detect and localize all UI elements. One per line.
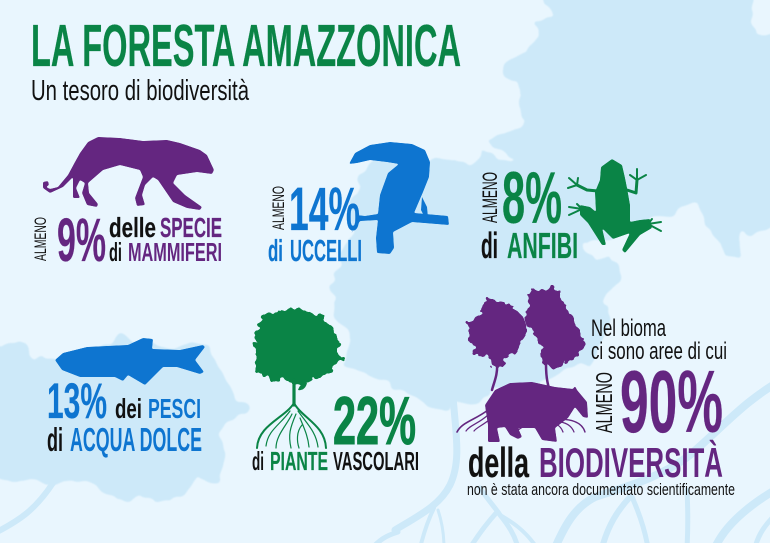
label: almeno: ALMENO — [269, 186, 288, 230]
panel: mammals — [31, 137, 222, 274]
text: delle specie: delle — [109, 212, 156, 243]
icon: tree with roots — [255, 309, 343, 448]
panel: amphibians: ANFIBI — [507, 225, 578, 266]
icon: trees and tapir — [457, 288, 588, 442]
panel: fish: PESCI — [148, 393, 201, 424]
subtitle: Un tesoro di biodiversità — [31, 75, 250, 107]
icon: toucan tail tuft — [421, 197, 428, 218]
text: di mammiferi: di — [109, 237, 122, 267]
panel: amphibians — [479, 158, 661, 266]
text: di uccelli: di — [268, 233, 283, 268]
panel: fish — [47, 338, 205, 458]
text: di acqua dolce: di — [47, 421, 63, 458]
text: di anfibi: di — [481, 225, 498, 266]
text: di piante vascolari: di — [252, 446, 264, 476]
panel: mammals: MAMMIFERI — [128, 237, 222, 267]
text: della biodiversità — [468, 439, 723, 486]
number: 13%: 13% — [47, 373, 107, 429]
icon: jaguar — [43, 137, 214, 210]
number: 8%: 8% — [502, 158, 562, 239]
icon: fish — [55, 338, 205, 385]
label: almeno: ALMENO — [479, 172, 502, 223]
text: dei pesci: dei — [115, 393, 142, 424]
text: della biodiversità: della — [468, 439, 529, 486]
text: di piante vascolari — [252, 446, 419, 476]
background: root strokes — [0, 378, 770, 543]
panel: birds — [268, 142, 449, 268]
panel: mammals: SPECIE — [160, 212, 222, 243]
text: nel bioma: Nel bioma — [591, 315, 666, 342]
icon: toucan — [348, 142, 449, 254]
number: 14%: 14% — [289, 175, 360, 243]
icon: frog — [568, 159, 661, 253]
number: 9%: 9% — [57, 206, 106, 274]
label: almeno: ALMENO — [591, 372, 617, 433]
text: di piante vascolari: PIANTE — [270, 446, 328, 476]
panel: fish: ACQUA DOLCE — [70, 421, 202, 458]
panel: plants — [252, 309, 419, 476]
text: di piante vascolari: VASCOLARI — [333, 446, 419, 476]
label: almeno: ALMENO — [31, 217, 50, 261]
panel: biome — [457, 288, 735, 499]
number: 22%: 22% — [333, 383, 416, 459]
panel: birds: UCCELLI — [290, 233, 362, 268]
